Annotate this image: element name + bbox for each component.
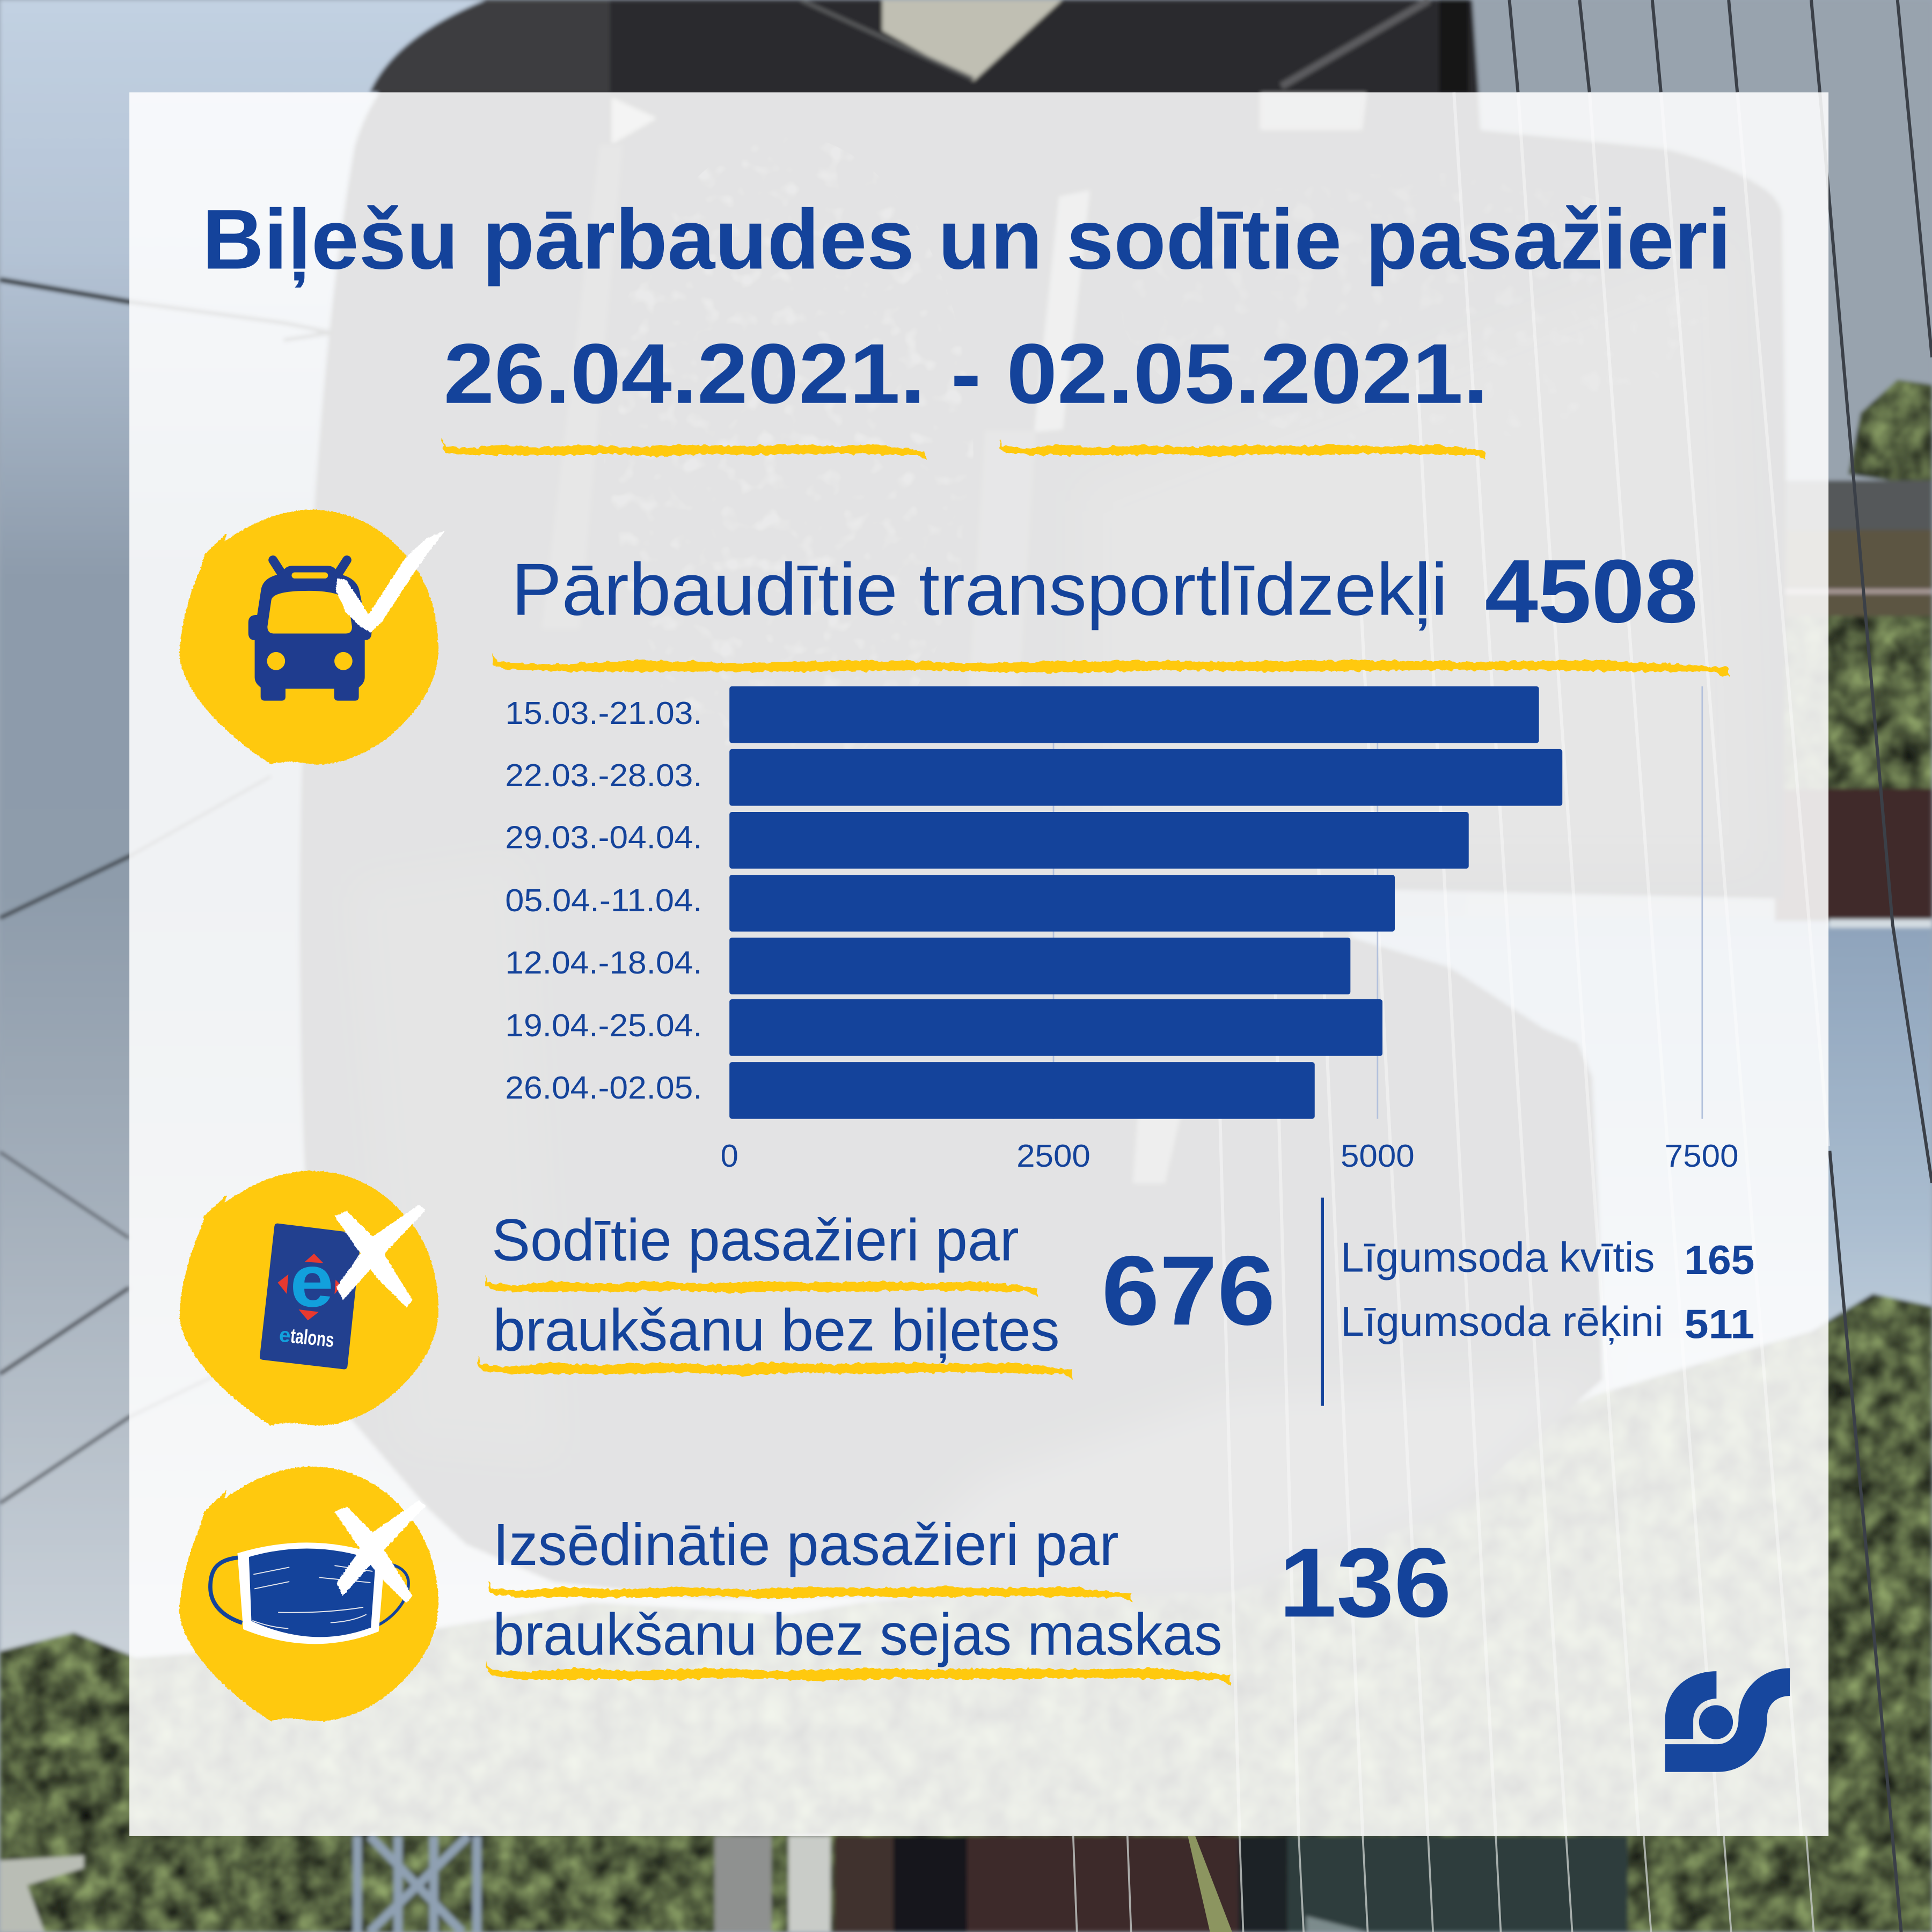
number: 676: 676 (1102, 1235, 1275, 1345)
breakdown: penalty invoices: Līgumsoda rēķini (1341, 1298, 1663, 1345)
section: removed passengers without masks (180, 1467, 1452, 1721)
underline: second date (1000, 438, 1485, 460)
heading: removed line 2: braukšanu bez sejas maskas (493, 1601, 1223, 1667)
divider (1321, 1198, 1324, 1406)
icon: e-talons card crossed out (180, 1171, 438, 1425)
title: Biļešu pārbaudes un sodītie pasažieri (202, 192, 1731, 288)
section: checked vehicles (180, 510, 1730, 764)
breakdown: penalty receipts: 165 (1685, 1238, 1754, 1283)
axis labels (721, 1138, 1739, 1174)
underline: fined line 1 (486, 1275, 1038, 1297)
icon: face mask crossed out (180, 1467, 438, 1721)
category labels: 15.03.-21.03. (505, 695, 702, 731)
axis labels: 5000 (1341, 1138, 1415, 1174)
category labels: 05.04.-11.04. (505, 882, 702, 918)
icon: e-talons card crossed out: talons (289, 1324, 335, 1352)
heading: removed line 1: Izsēdinātie pasažieri par (493, 1512, 1119, 1578)
category labels: 12.04.-18.04. (505, 945, 702, 980)
category labels (505, 695, 702, 1106)
axis labels: 0 (721, 1138, 738, 1174)
number: 4508: 4508 (1485, 540, 1698, 641)
icon: e-talons card crossed out: e (278, 1323, 292, 1348)
heading: fined passengers line 1: Sodītie pasažieri par (492, 1208, 1019, 1274)
underline: removed line 1 (488, 1580, 1132, 1602)
axis labels: 7500 (1665, 1138, 1739, 1174)
axis labels: 2500 (1016, 1138, 1091, 1174)
heading: checked vehicles: Pārbaudītie transportlīdzekļi (511, 548, 1448, 631)
heading: fined passengers line 2: braukšanu bez biļetes (493, 1297, 1059, 1363)
category labels: 26.04.-02.05. (505, 1070, 702, 1106)
category labels: 29.03.-04.04. (505, 819, 702, 855)
category labels: 22.03.-28.03. (505, 757, 702, 793)
bar chart: checked vehicles per week (505, 686, 1739, 1174)
translucent white panel (129, 92, 1828, 1836)
bars (729, 686, 1562, 1119)
icon: e-talons card crossed out: e (290, 1240, 334, 1322)
category labels: 19.04.-25.04. (505, 1007, 702, 1043)
date range: 26.04.2021. - 02.05.2021. (444, 326, 1488, 421)
section: fined passengers (180, 1171, 1754, 1425)
breakdown: penalty receipts: Līgumsoda kvītis (1341, 1233, 1655, 1280)
icon: bus with check mark (180, 510, 445, 764)
underline: checked vehicles (493, 653, 1730, 677)
number: 136: 136 (1279, 1527, 1452, 1637)
underline: fined line 2 (478, 1356, 1073, 1380)
reflection lines on panel (1220, 92, 1828, 1836)
underline: first date (442, 438, 926, 460)
logo (1665, 1668, 1790, 1772)
underline: removed line 2 (487, 1661, 1231, 1685)
breakdown: penalty invoices: 511 (1685, 1301, 1754, 1347)
